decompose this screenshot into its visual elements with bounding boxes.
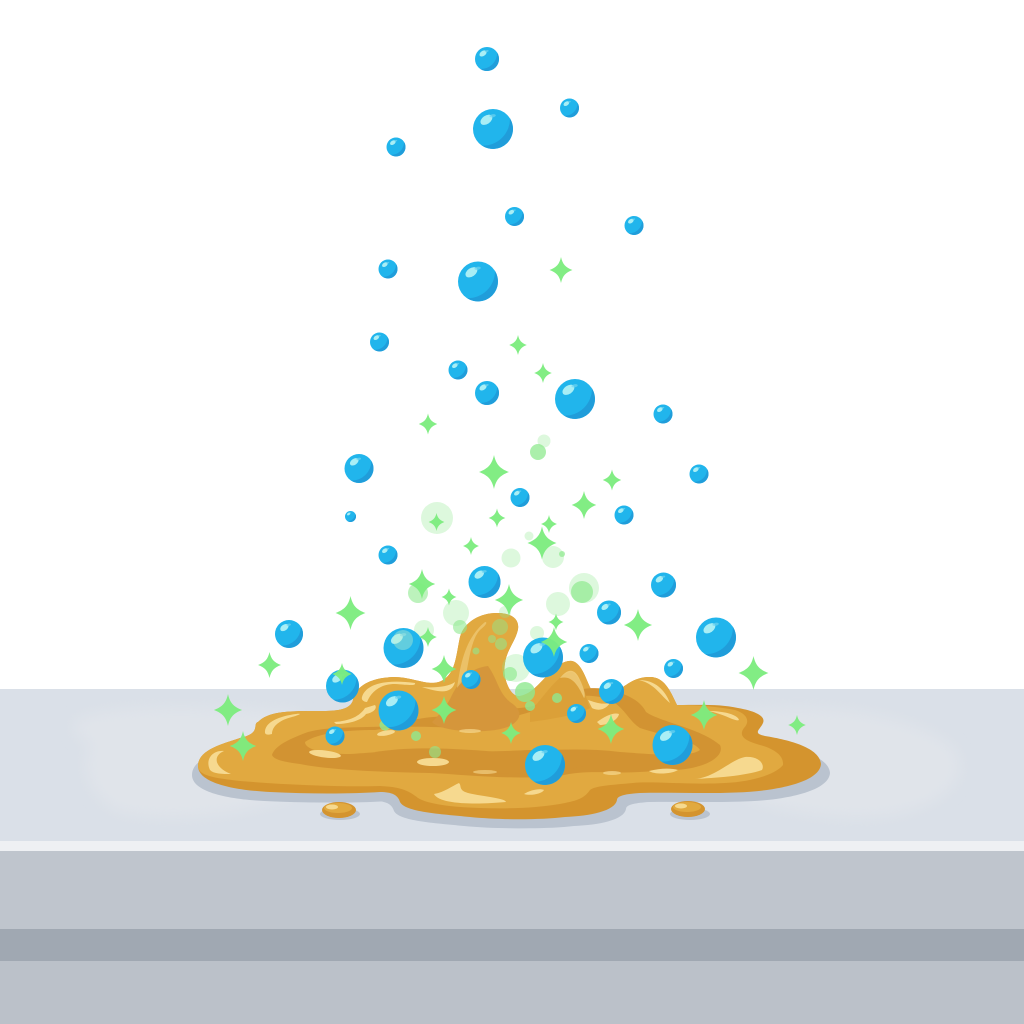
- second crest shading: [530, 672, 590, 722]
- inner dark pool: [272, 688, 721, 778]
- small puddle drop right: [670, 801, 710, 820]
- dark lower channel: [375, 748, 612, 774]
- pale green bubble over droplet: [393, 630, 413, 650]
- puddle: [192, 613, 830, 828]
- central column shading: [432, 666, 519, 731]
- blue water droplets: [275, 47, 736, 785]
- small puddle drop left: [320, 802, 360, 820]
- puddle base: [198, 613, 821, 819]
- puddle upper surface: [198, 613, 783, 808]
- pale green bubbles: [380, 434, 599, 758]
- faint water stain right: [740, 708, 960, 817]
- faint water stain left: [74, 708, 320, 817]
- inner light pool: [305, 696, 700, 755]
- green sparkles: [214, 257, 806, 761]
- highlights: [208, 622, 763, 804]
- countertop: [0, 689, 1024, 841]
- counter front edge: [0, 841, 1024, 1024]
- puddle shadow: [192, 759, 830, 828]
